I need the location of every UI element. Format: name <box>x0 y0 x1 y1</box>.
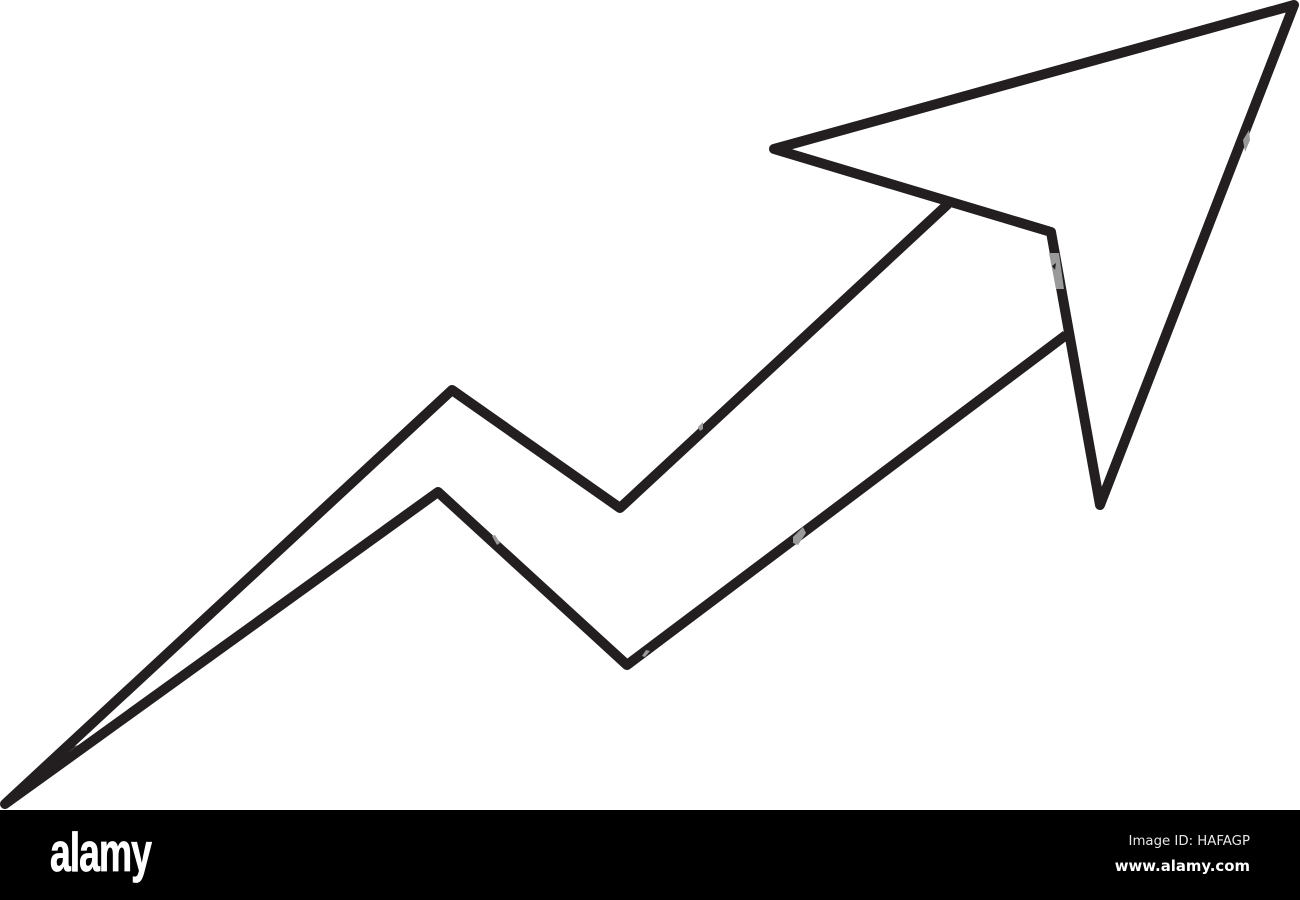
footer bar <box>0 810 1300 900</box>
image id: Image ID: HAFAGP <box>1129 834 1250 849</box>
website: www.alamy.com <box>1115 857 1250 875</box>
logo: alamy: alamy <box>50 821 151 883</box>
